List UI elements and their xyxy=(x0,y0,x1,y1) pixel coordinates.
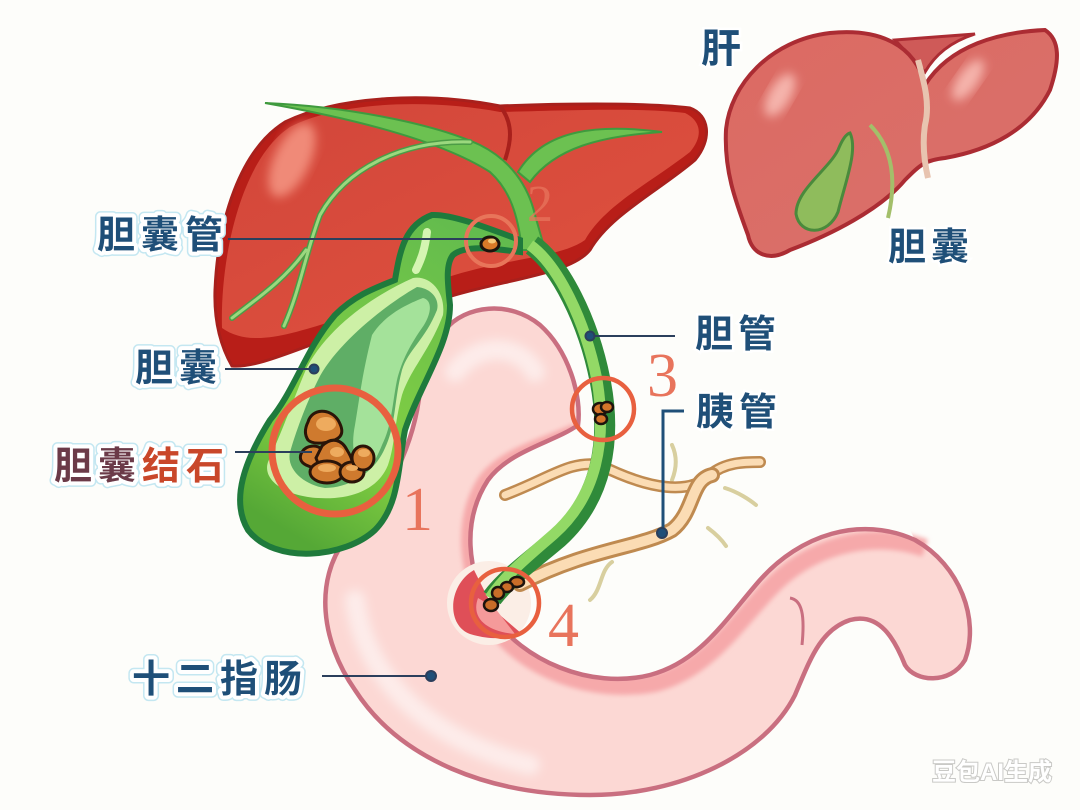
label: cystic duct: 胆囊管 xyxy=(97,215,229,257)
bile ducts in liver xyxy=(232,103,662,326)
leader lines xyxy=(225,239,684,681)
gallbladder neck highlight xyxy=(416,232,427,270)
inset liver lobe band xyxy=(918,60,928,178)
inset duct xyxy=(870,125,892,218)
inset highlights xyxy=(758,69,802,121)
duodenum xyxy=(325,309,970,795)
gallbladder lumen light xyxy=(353,298,430,474)
numbers xyxy=(402,176,678,660)
liver highlight xyxy=(259,116,325,204)
duodenum inner gap cover xyxy=(470,400,915,679)
numbers: 2 xyxy=(527,176,553,233)
label: gallbladder: 胆囊 xyxy=(135,348,223,390)
label: gallbladder: 胆囊 xyxy=(135,348,223,390)
numbers: 1 xyxy=(402,476,433,544)
stone highlights xyxy=(316,417,370,472)
red circles xyxy=(272,216,634,637)
papilla opening xyxy=(447,561,531,645)
numbers: 4 xyxy=(548,592,579,660)
common bile duct xyxy=(490,245,605,598)
main liver xyxy=(215,98,706,366)
inset liver xyxy=(726,30,1057,256)
duodenum crease xyxy=(790,598,803,645)
stones at cystic duct xyxy=(481,237,499,251)
numbers: 3 xyxy=(647,342,678,410)
pancreatic duct xyxy=(505,445,760,600)
gallbladder xyxy=(240,215,520,554)
inset back lobe xyxy=(895,34,975,72)
stone at bile duct xyxy=(593,402,613,424)
right branch xyxy=(518,129,662,182)
stones in gallbladder xyxy=(300,411,374,483)
label: gallstones: 胆囊结石 xyxy=(54,446,230,488)
label: duodenum: 十二指肠 xyxy=(132,659,308,701)
liver lobe line xyxy=(500,106,510,160)
label: gallstones: 胆囊结石 xyxy=(54,446,230,488)
gallbladder lumen xyxy=(289,287,438,488)
label: pancreatic duct: 胰管 xyxy=(696,392,782,434)
inset gallbladder xyxy=(796,133,853,230)
duodenum inner fold xyxy=(470,432,925,686)
label: liver: 肝 xyxy=(701,27,746,71)
label: gallbladder: 胆囊 xyxy=(135,348,223,390)
duodenum highlight xyxy=(355,350,535,765)
watermark: 豆包AI生成 xyxy=(932,759,1052,786)
hepatic sub branch xyxy=(232,142,470,326)
gallbladder inner wall xyxy=(267,278,443,498)
label: duodenum: 十二指肠 xyxy=(132,659,308,701)
stones at ampulla xyxy=(484,577,524,611)
label: gallbladder inset: 胆囊 xyxy=(888,227,974,269)
label: gallstones: 胆囊结石 xyxy=(54,446,230,488)
label: cystic duct: 胆囊管 xyxy=(97,215,229,257)
inset liver body xyxy=(726,30,1057,256)
label: duodenum: 十二指肠 xyxy=(132,659,308,701)
liver face xyxy=(222,104,699,338)
label: bile duct: 胆管 xyxy=(695,314,781,356)
left upper branch xyxy=(265,103,545,250)
duodenum outline xyxy=(325,309,970,795)
label: cystic duct: 胆囊管 xyxy=(97,215,229,257)
